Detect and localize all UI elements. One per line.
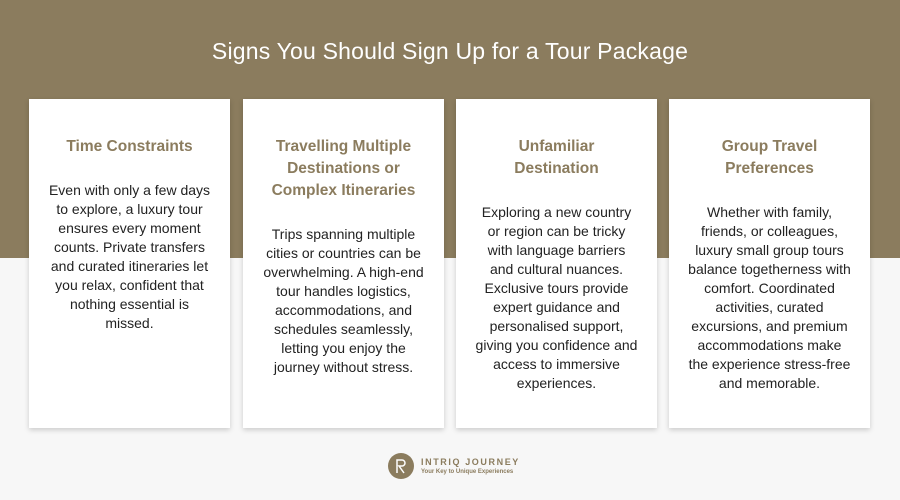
text block: excursions, and premium	[691, 318, 848, 334]
text block: experiences.	[517, 374, 596, 390]
heading: Preferences	[725, 160, 814, 177]
text block: letting you enjoy the	[281, 340, 406, 356]
text block: or region can be tricky	[488, 222, 625, 238]
text block: overwhelming. A high-end	[263, 264, 424, 280]
text block: Whether with family,	[707, 204, 832, 220]
title: Signs You Should Sign Up for a Tour Package	[212, 38, 688, 64]
heading	[722, 138, 817, 177]
text block	[263, 226, 424, 375]
text block: the experience stress-free	[689, 356, 850, 372]
heading: Complex Itineraries	[272, 182, 415, 199]
text block	[49, 182, 210, 330]
text block: cities or countries can be	[266, 244, 421, 260]
heading: Destinations or	[287, 160, 400, 177]
text block: expert guidance and	[493, 298, 620, 314]
text block: comfort. Coordinated	[704, 280, 835, 296]
heading: Travelling Multiple	[276, 138, 411, 155]
panel: time constraints	[29, 99, 230, 428]
text block: luxury small group tours	[695, 242, 844, 258]
text block: schedules seamlessly,	[274, 320, 413, 336]
text block: Even with only a few days	[49, 182, 210, 198]
text block: balance togetherness with	[688, 260, 851, 276]
text block	[476, 204, 637, 391]
text block: to explore, a luxury tour	[56, 200, 203, 216]
heading	[272, 138, 415, 199]
text block: and cultural nuances.	[490, 260, 623, 276]
brand name: INTRIQ JOURNEY	[421, 457, 520, 467]
text block: ensures every moment	[58, 220, 201, 236]
heading	[514, 138, 599, 177]
heading: Group Travel	[722, 138, 817, 155]
logo	[388, 453, 520, 479]
text block: missed.	[105, 314, 154, 330]
text block: Exclusive tours provide	[485, 280, 628, 296]
header band	[0, 0, 900, 258]
text block: tour handles logistics,	[276, 282, 411, 298]
text block: you relax, confident that	[55, 276, 204, 292]
text block: access to immersive	[493, 356, 620, 372]
text block: friends, or colleagues,	[701, 222, 838, 238]
text block: personalised support,	[490, 318, 623, 334]
text block: counts. Private transfers	[54, 238, 205, 254]
text block: Exploring a new country	[482, 204, 631, 220]
tagline: Your Key to Unique Experiences	[421, 469, 513, 475]
text block: nothing essential is	[70, 296, 189, 312]
text block: activities, curated	[715, 298, 824, 314]
heading: Unfamiliar	[519, 138, 594, 155]
heading: Time Constraints	[66, 138, 193, 155]
text block: journey without stress.	[274, 358, 413, 374]
panel: group travel	[669, 99, 870, 428]
text block: with language barriers	[488, 242, 625, 258]
panel: multiple destinations	[243, 99, 444, 428]
text block: giving you confidence and	[476, 336, 637, 352]
text block: accommodations make	[698, 336, 841, 352]
text block: and curated itineraries let	[51, 258, 208, 274]
icon: logo mark	[388, 453, 414, 479]
text block: Trips spanning multiple	[272, 226, 415, 242]
text block: and memorable.	[719, 374, 820, 390]
text block: accommodations, and	[275, 302, 412, 318]
panel: unfamiliar destination	[456, 99, 657, 428]
heading: Destination	[514, 160, 599, 177]
text block	[688, 204, 851, 390]
